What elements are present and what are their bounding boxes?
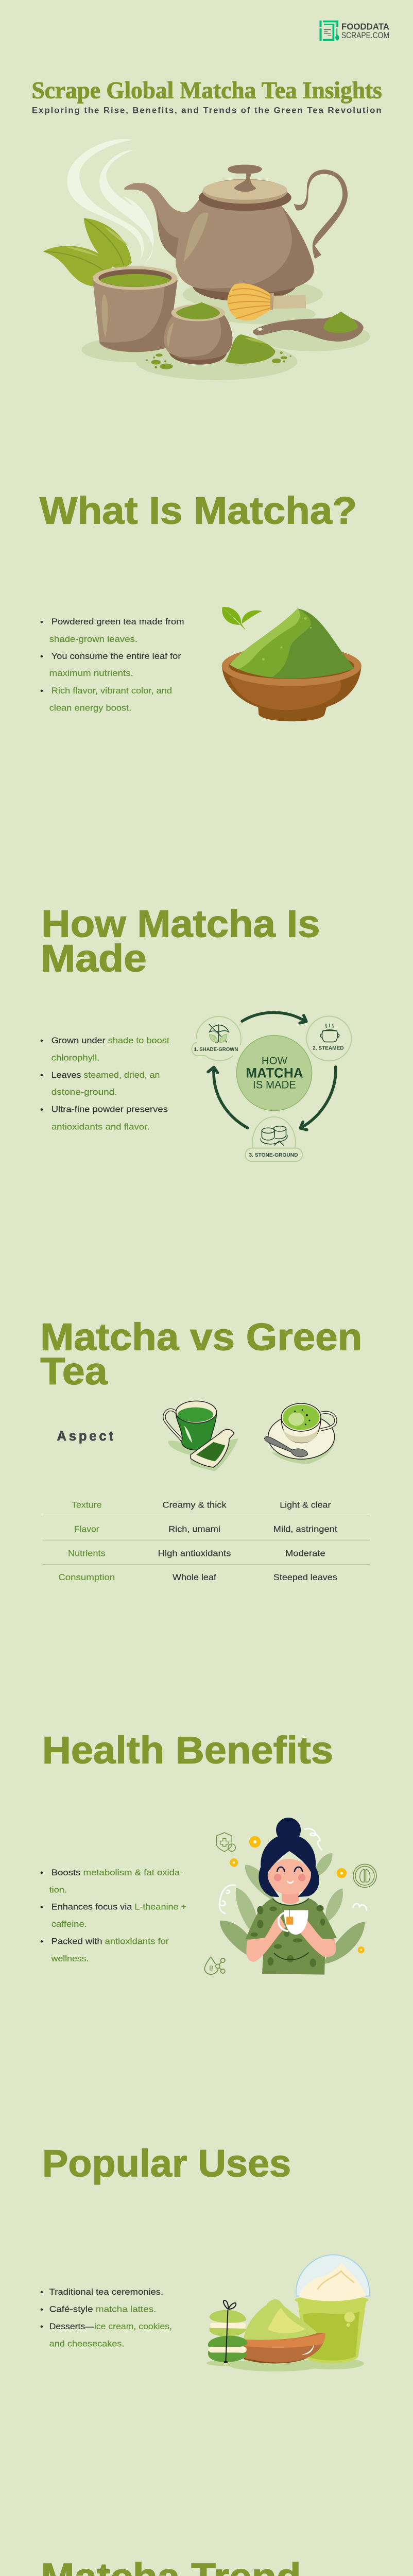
bullet list: Desserts—ice cream, cookies, [49,2321,172,2331]
heading [40,1315,362,1393]
icon: shield [216,1833,235,1852]
bullet list [41,617,184,713]
table: comparison: Mild, astringent [273,1524,337,1534]
teapot handle [294,170,348,259]
bullet list: Traditional tea ceremonies. [49,2287,163,2297]
table: comparison: Rich, umami [168,1524,220,1534]
bullet list: Packed with antioxidants for [51,1936,169,1946]
step 2 steamed [306,1016,351,1061]
table: comparison: Texture [72,1500,102,1510]
torso [246,1899,337,1975]
teapot foot [192,284,297,301]
hair [259,1834,319,1897]
heading: How Matcha Is [41,902,320,945]
step 3 stone-ground [245,1117,302,1161]
step 1 shade-grown [192,1016,241,1061]
bullet list: wellness. [51,1954,89,1963]
bullet list: antioxidants and flavor. [51,1122,150,1131]
table: comparison: Moderate [285,1548,325,1558]
icon: vitamin b: B [209,1964,214,1972]
illustration: matcha desserts [206,2255,369,2371]
powder pile [225,334,276,364]
whisk [271,295,306,309]
spoon [253,317,364,342]
table: comparison: Steeped leaves [273,1572,337,1582]
heading [41,902,320,980]
heading: Made [41,937,147,980]
steam [67,139,153,263]
bullet list: shade-grown leaves. [49,634,137,644]
logo: top right: FOODDATA [341,22,389,32]
cup [93,280,178,352]
illustration: green tea cup and saucer [265,1403,336,1464]
panel: what is matcha [40,488,362,721]
heading: What Is Matcha? [40,488,357,532]
table: comparison: Light & clear [280,1500,331,1510]
step 1 shade-grown: 1. SHADE-GROWN [194,1047,238,1053]
heading: Matcha vs Green [40,1315,362,1358]
center circle: MATCHA [246,1065,303,1080]
bullet list: dstone-ground. [51,1087,117,1097]
illustration: matcha bowl [222,607,362,721]
panel: health benefits [41,1728,376,1975]
bullet list [41,1868,186,1963]
bullet list: Powdered green tea made from [51,617,184,626]
logo: top right: SCRAPE.COM [341,30,389,40]
panel: hero [31,21,389,380]
table: comparison: Flavor [74,1524,99,1534]
step 2 steamed: 2. STEAMED [313,1046,344,1052]
bullet list [41,2287,172,2349]
panel: popular uses [41,2142,369,2371]
bullet list: Boosts metabolism & fat oxida- [51,1868,183,1877]
table: comparison: Nutrients [68,1548,106,1558]
center circle: HOW [262,1055,288,1066]
bullet list: Rich flavor, vibrant color, and [51,686,172,696]
macarons [210,2310,246,2323]
table: comparison: Consumption [58,1572,115,1582]
step 3 stone-ground: 3. STONE-GROUND [249,1153,298,1158]
small bowl [169,352,227,365]
heading: Tea [40,1349,108,1393]
bullet list: chlorophyll. [51,1053,99,1063]
panel: matcha vs green tea [40,1315,370,1582]
bullet list: Ultra-fine powder preserves [51,1105,168,1114]
matcha mound [244,2299,317,2340]
table: comparison: Creamy & thick [162,1500,227,1510]
label: aspect: Aspect [57,1429,113,1444]
bullet list: clean energy boost. [49,703,131,713]
whipped cream dome [296,2255,369,2296]
neck and head [282,1885,299,1904]
bullet list [41,1036,169,1131]
table: comparison: High antioxidants [158,1548,231,1558]
yellow flowers [230,1836,365,1953]
illustration: matcha cup and scoop [164,1401,238,1471]
bullet list: and cheesecakes. [49,2339,124,2349]
table: comparison [43,1500,370,1582]
bullet list: tion. [49,1885,67,1894]
center circle: IS MADE [253,1079,296,1091]
heading: Popular Uses [42,2142,291,2184]
bullet list: maximum nutrients. [49,668,133,678]
background leaves [220,1853,365,1964]
icon: vitamin b [204,1957,225,1974]
leaves [43,218,132,286]
mug [284,1910,308,1935]
teapot body [124,183,314,293]
logo: top right [319,21,389,41]
shadows [206,2358,364,2371]
title: Scrape Global Matcha Tea Insights [31,77,382,104]
drink cup [298,2301,366,2363]
illustration: woman with tea [204,1818,376,1975]
bullet list: Enhances focus via L-theanine + [51,1902,186,1912]
center circle [236,1036,312,1111]
bowl [244,2333,325,2362]
panel: how matcha is made [41,902,351,1161]
bullet list: Grown under shade to boost [51,1036,169,1045]
icon: brain [353,1864,376,1887]
heading: Health Benefits [42,1728,333,1771]
subtitle: Exploring the Rise, Benefits, and Trends of the Green Tea Revolution [32,105,382,115]
bullet list: caffeine. [51,1919,87,1929]
diagram: process cycle [192,1012,351,1161]
illustration: teapot set [43,139,370,380]
bullet list: Café-style matcha lattes. [49,2304,156,2314]
table: comparison: Whole leaf [173,1572,216,1582]
white squiggles [219,1828,367,1913]
bullet list: You consume the entire leaf for [51,651,181,661]
bullet list: Leaves steamed, dried, an [51,1070,160,1080]
arms [246,1916,286,1962]
cycle arrows [208,1012,336,1130]
